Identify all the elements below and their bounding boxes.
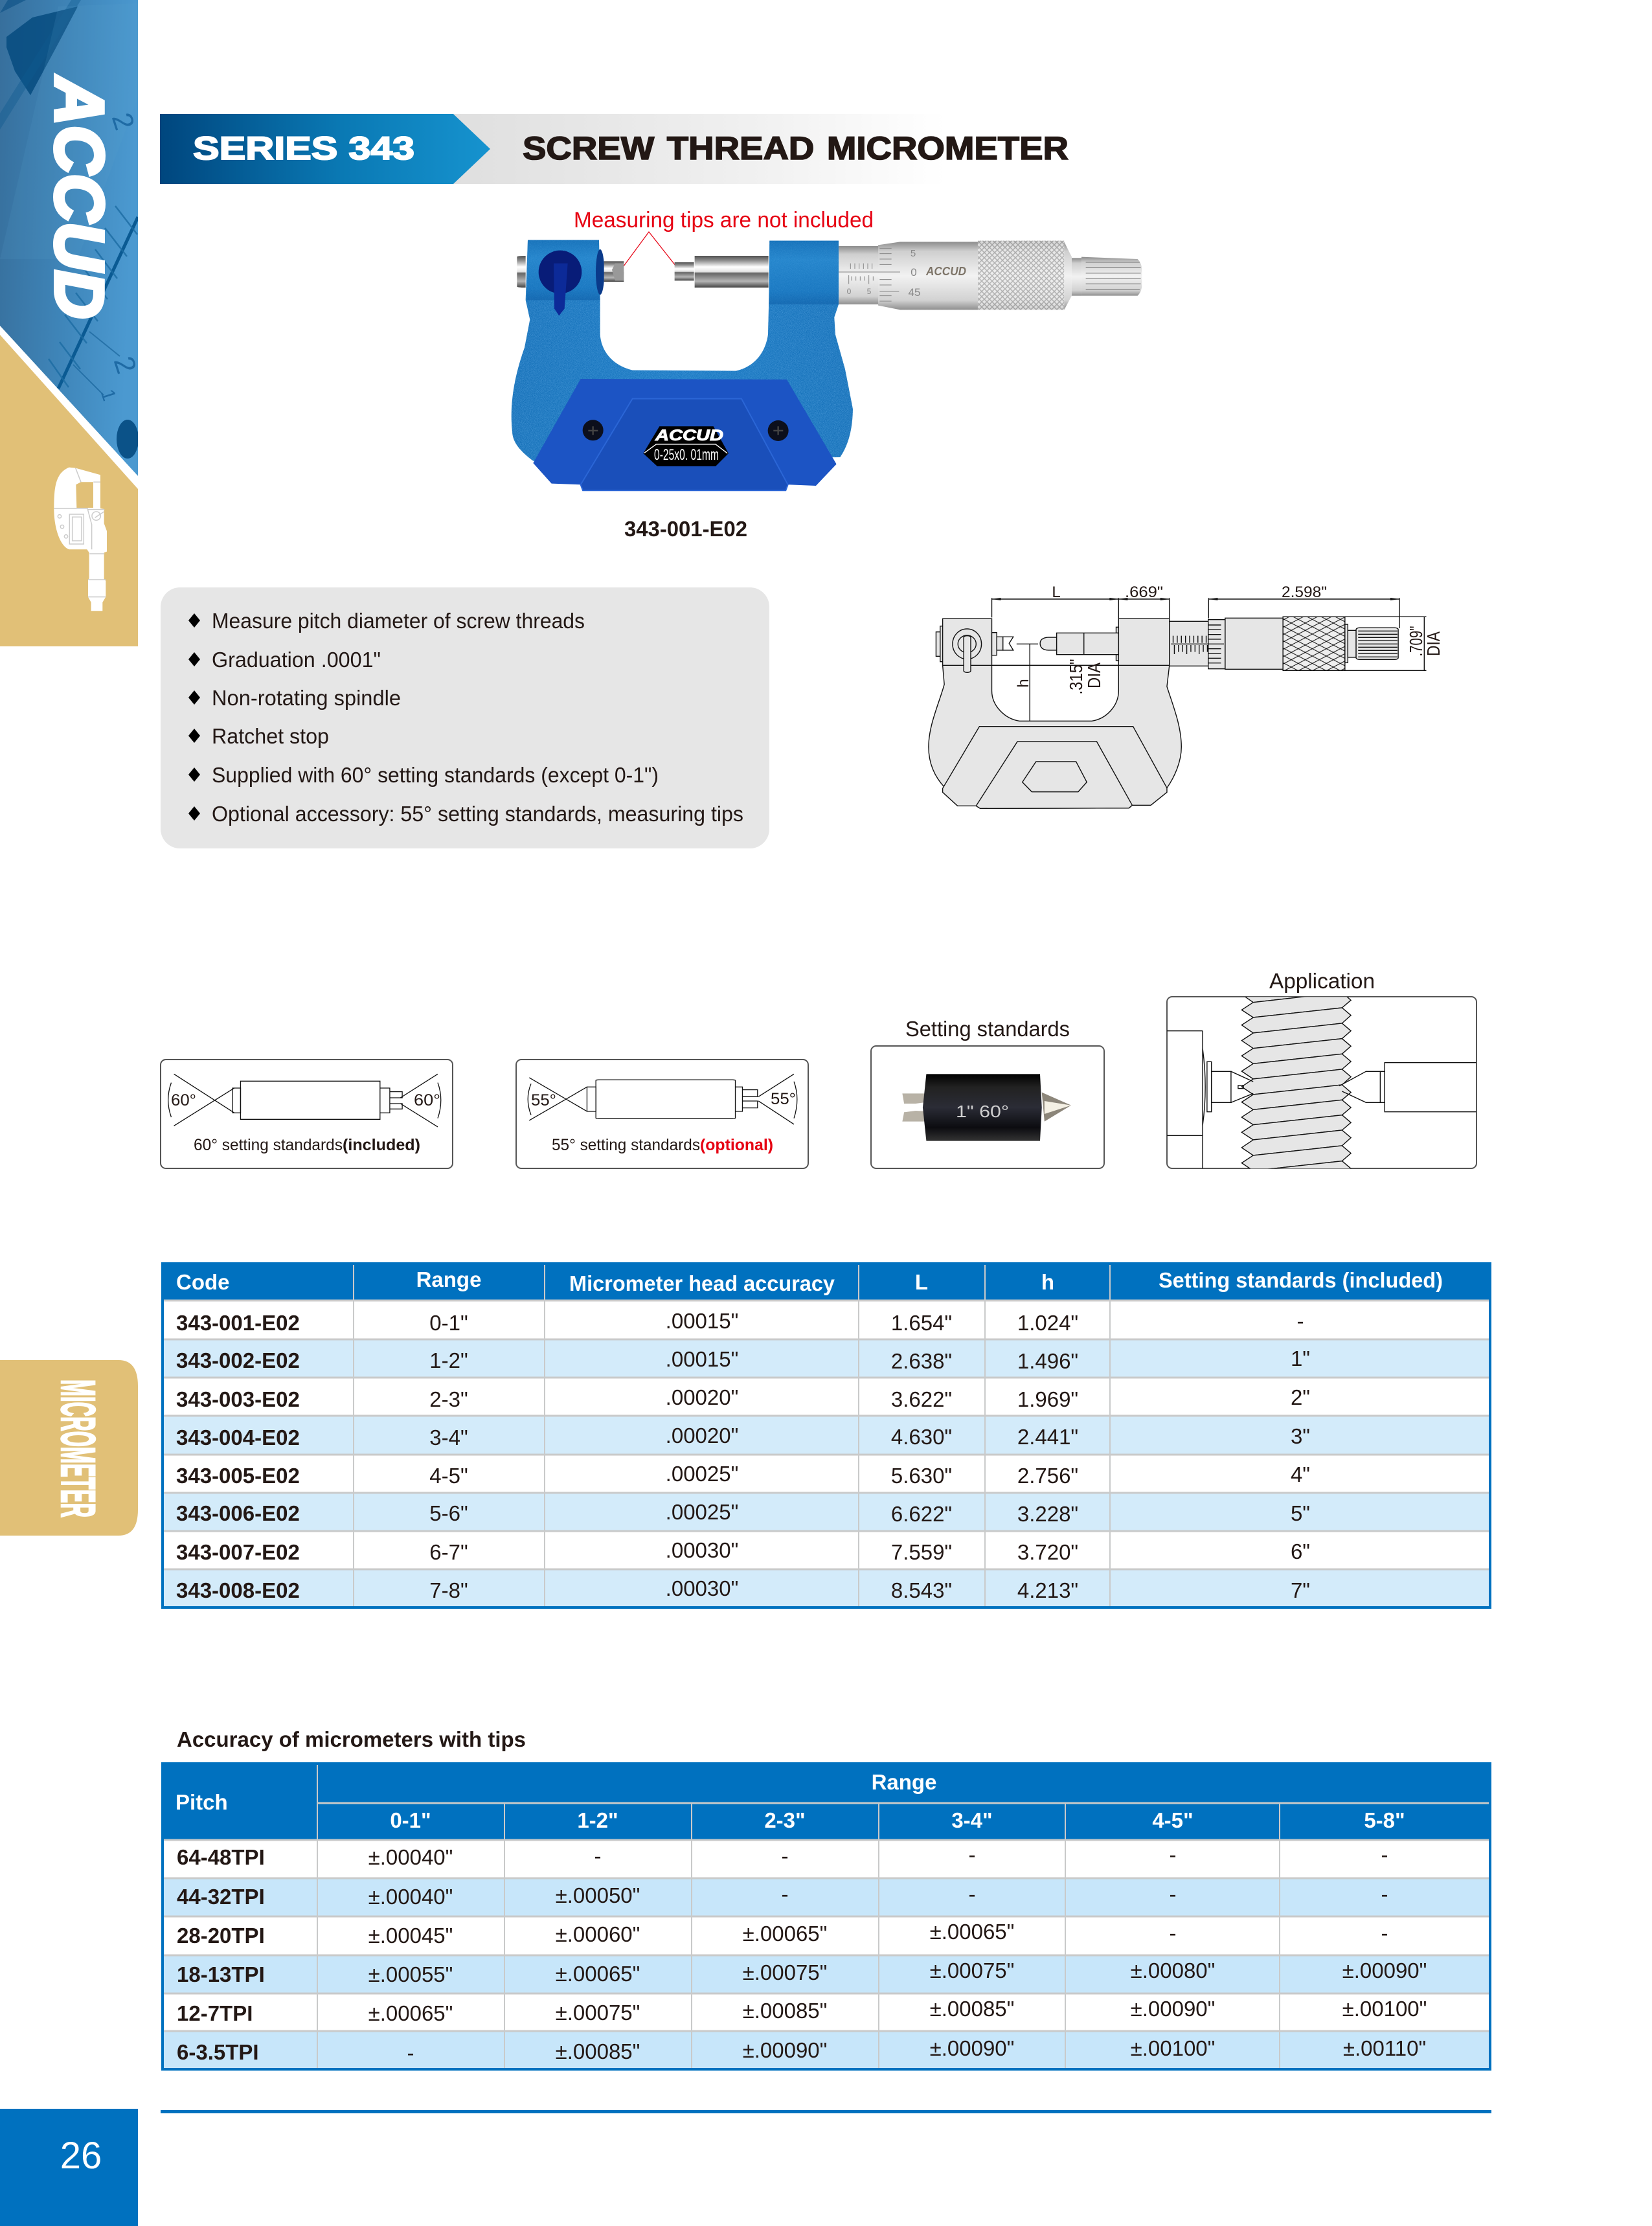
row 3: 2"	[1291, 1385, 1310, 1409]
table header: 2-3"	[764, 1808, 806, 1832]
row 12-7TPI	[177, 1997, 1427, 2025]
row 28-20TPI: ±.00045"	[368, 1924, 453, 1948]
blue cover	[533, 379, 837, 490]
row 18-13TPI: ±.00055"	[368, 1962, 453, 1986]
row 64-48TPI: 64-48TPI	[177, 1845, 265, 1869]
caption: 55° setting standards	[552, 1136, 700, 1154]
icon: digital micrometer	[54, 468, 107, 611]
table header: 0-1"	[390, 1808, 431, 1832]
row 3	[176, 1385, 1310, 1411]
product photo: micrometer: 0-25x0. 01mm	[654, 446, 719, 464]
footer rule	[161, 2110, 1491, 2113]
technical drawing with dimensions: DIA	[1084, 663, 1104, 688]
row 2: 1.496"	[1017, 1349, 1078, 1373]
sidebar: photo banner with logo: 2	[106, 109, 141, 134]
row 64-48TPI: -	[969, 1843, 975, 1867]
row 6: 6.622"	[891, 1502, 952, 1526]
panel: 60 degree setting standards: 60°	[414, 1091, 440, 1109]
row 64-48TPI: -	[781, 1844, 789, 1868]
micrometer head	[839, 241, 1142, 310]
panel: setting standards photo	[871, 1017, 1104, 1168]
row 28-20TPI: ±.00065"	[930, 1920, 1014, 1944]
row 8: 343-008-E02	[176, 1578, 300, 1602]
row 1: 1.654"	[891, 1311, 952, 1335]
table header: L	[915, 1270, 928, 1294]
row 44-32TPI: ±.00050"	[556, 1883, 640, 1907]
table: accuracy with tips	[161, 1762, 1491, 2069]
heading: accuracy table: Accuracy of micrometers with tips	[177, 1727, 526, 1751]
row 8: 4.213"	[1017, 1578, 1078, 1602]
sidebar: gold panel with digital micrometer icon	[0, 335, 138, 646]
technical drawing with dimensions: .709"	[1406, 626, 1426, 657]
frame	[512, 240, 853, 490]
product photo: micrometer: 0	[911, 266, 917, 278]
row 5	[176, 1462, 1310, 1488]
row 1: 343-001-E02	[176, 1311, 300, 1335]
sidebar: photo banner with logo: 2	[107, 352, 142, 378]
row 4: 3"	[1291, 1424, 1310, 1448]
table header: Range	[416, 1267, 481, 1291]
heading: product title: SCREW THREAD MICROMETER	[523, 130, 1069, 166]
row 5: 5.630"	[891, 1464, 952, 1488]
row 6: 5-6"	[429, 1501, 468, 1525]
row 7: 3.720"	[1017, 1540, 1078, 1564]
row 18-13TPI: ±.00065"	[556, 1962, 640, 1986]
panel: features	[161, 587, 769, 848]
row 2	[176, 1346, 1310, 1373]
row 6-3.5TPI: ±.00100"	[1131, 2036, 1215, 2060]
table: specifications	[161, 1262, 1491, 1608]
label: Setting standards	[905, 1017, 1070, 1041]
row 2: 343-002-E02	[176, 1348, 300, 1372]
table header: Micrometer head accuracy	[569, 1271, 835, 1295]
heading: series: SERIES 343	[193, 130, 414, 166]
row 6-3.5TPI: ±.00090"	[930, 2036, 1014, 2060]
feature 4: Ratchet stop	[212, 724, 329, 748]
row 3: .00020"	[666, 1385, 738, 1409]
panel: 55 degree setting standards	[516, 1060, 808, 1168]
table header	[161, 1762, 1491, 1840]
row 44-32TPI	[177, 1882, 1388, 1909]
row 8: 7-8"	[429, 1578, 468, 1602]
product photo: micrometer	[512, 240, 1142, 490]
row 12-7TPI: ±.00075"	[556, 2001, 640, 2025]
feature 5: Supplied with 60° setting standards (except 0-1")	[212, 763, 659, 787]
row 6-3.5TPI: ±.00110"	[1343, 2036, 1426, 2060]
product photo: micrometer: 5	[867, 287, 872, 296]
row 4: 4.630"	[891, 1425, 952, 1449]
row 12-7TPI: ±.00065"	[368, 2001, 453, 2025]
row 6-3.5TPI: ±.00090"	[743, 2038, 827, 2062]
row 28-20TPI: ±.00065"	[743, 1922, 827, 1946]
logo: ACCUD: ACCUD	[41, 75, 117, 319]
feature 3: Non-rotating spindle	[212, 686, 401, 710]
row 2: 1"	[1291, 1346, 1310, 1370]
row 5: 343-005-E02	[176, 1464, 300, 1488]
table header: 5-8"	[1364, 1808, 1405, 1832]
row 2: 2.638"	[891, 1349, 952, 1373]
row 6-3.5TPI: ±.00085"	[556, 2039, 640, 2063]
row 8: 8.543"	[891, 1578, 952, 1602]
row 28-20TPI: -	[1170, 1921, 1176, 1945]
table header: 3-4"	[951, 1808, 993, 1832]
row 28-20TPI: -	[1381, 1921, 1388, 1945]
page number box: 26	[60, 2135, 102, 2177]
label: Application	[1269, 969, 1375, 993]
technical drawing with dimensions: 2.598"	[1282, 584, 1327, 601]
row 4: 343-004-E02	[176, 1425, 300, 1449]
technical drawing with dimensions	[929, 584, 1443, 808]
row 18-13TPI: ±.00080"	[1131, 1959, 1215, 1982]
row 8	[176, 1576, 1310, 1602]
row 12-7TPI: ±.00085"	[930, 1997, 1014, 2021]
row 4: .00020"	[666, 1424, 738, 1448]
row 3: 343-003-E02	[176, 1387, 300, 1411]
row 18-13TPI: ±.00090"	[1342, 1959, 1427, 1982]
row 5: .00025"	[666, 1462, 738, 1486]
row 44-32TPI: -	[969, 1882, 975, 1906]
row 5: 2.756"	[1017, 1464, 1078, 1488]
row 6: 5"	[1291, 1501, 1310, 1525]
table header: h	[1041, 1270, 1054, 1294]
row 18-13TPI: ±.00075"	[743, 1960, 827, 1984]
caption: 60° setting standards	[194, 1136, 343, 1154]
row 3: 1.969"	[1017, 1387, 1078, 1411]
row 18-13TPI: 18-13TPI	[177, 1962, 265, 1986]
row 7: 6"	[1291, 1539, 1310, 1563]
row 44-32TPI: ±.00040"	[368, 1885, 453, 1909]
note: measuring tips	[574, 208, 874, 269]
row 1: 0-1"	[429, 1311, 468, 1335]
row 2: .00015"	[666, 1347, 738, 1371]
badge text: ACCUD	[655, 427, 723, 444]
row 6: 343-006-E02	[176, 1501, 300, 1525]
row 12-7TPI: ±.00085"	[743, 1999, 827, 2023]
row 12-7TPI: ±.00090"	[1131, 1997, 1215, 2021]
table header: 4-5"	[1152, 1808, 1194, 1832]
row 7: 6-7"	[429, 1540, 468, 1564]
dimension labels: L	[1052, 584, 1061, 601]
row 4: 2.441"	[1017, 1425, 1078, 1449]
panel: 55 degree setting standards: (optional)	[700, 1136, 773, 1154]
row 28-20TPI	[177, 1920, 1388, 1948]
technical drawing with dimensions: DIA	[1423, 631, 1443, 656]
feature 2: Graduation .0001"	[212, 648, 381, 672]
panel: 60 degree setting standards: (included)	[343, 1136, 420, 1154]
technical drawing with dimensions: .669"	[1125, 584, 1163, 601]
table header: Range	[872, 1770, 936, 1794]
row 64-48TPI: ±.00040"	[368, 1845, 453, 1869]
row 8: .00030"	[666, 1576, 738, 1600]
row 6: .00025"	[666, 1500, 738, 1524]
table header	[161, 1262, 1491, 1300]
row 3: 3.622"	[891, 1387, 952, 1411]
row 28-20TPI: ±.00060"	[556, 1922, 640, 1946]
product photo: micrometer: 5	[911, 248, 916, 259]
panel: 60 degree setting standards	[161, 1060, 453, 1168]
product code label: 343-001-E02	[624, 517, 747, 541]
row 12-7TPI: ±.00100"	[1342, 1997, 1427, 2021]
row 44-32TPI: 44-32TPI	[177, 1885, 265, 1909]
row 64-48TPI: -	[1170, 1843, 1176, 1867]
row 18-13TPI	[177, 1959, 1427, 1986]
product photo: micrometer: 0	[847, 287, 852, 296]
row 64-48TPI: -	[594, 1844, 601, 1868]
row 6-3.5TPI: -	[407, 2041, 414, 2065]
panel: application diagram	[1167, 969, 1477, 1186]
product photo: micrometer: 45	[909, 286, 920, 299]
row 7	[176, 1538, 1310, 1564]
dimension lines	[992, 598, 1426, 721]
technical drawing with dimensions: .315"	[1066, 659, 1086, 694]
row 5: 4-5"	[429, 1464, 468, 1488]
row 4	[176, 1424, 1310, 1449]
row 12-7TPI: 12-7TPI	[177, 2001, 253, 2025]
panel: 60 degree setting standards: 60°	[171, 1091, 196, 1109]
row 44-32TPI: -	[1381, 1882, 1388, 1906]
row 44-32TPI: -	[1170, 1882, 1176, 1906]
row 7: 7.559"	[891, 1540, 952, 1564]
tab: MICROMETER	[0, 1360, 138, 1536]
table header: 1-2"	[577, 1808, 618, 1832]
table header: Setting standards (included)	[1159, 1268, 1443, 1292]
row 2: 1-2"	[429, 1348, 468, 1372]
text: MICROMETER	[51, 1380, 105, 1517]
product photo: micrometer: ACCUD	[925, 265, 966, 278]
page number box	[0, 2109, 138, 2226]
table header: Pitch	[175, 1790, 228, 1814]
row 44-32TPI: -	[781, 1882, 789, 1906]
table header: Code	[176, 1270, 229, 1294]
feature 6: Optional accessory: 55° setting standards, measuring tips	[212, 802, 743, 826]
row 6: 3.228"	[1017, 1502, 1078, 1526]
sidebar: photo banner with logo: 1	[96, 387, 120, 403]
row 5: 4"	[1291, 1462, 1310, 1486]
technical drawing with dimensions: h	[1015, 679, 1032, 688]
row 8: 7"	[1291, 1578, 1310, 1602]
row 1: -	[1296, 1309, 1304, 1333]
note: measuring tips: Measuring tips are not included	[574, 208, 874, 233]
panel: 55 degree setting standards: 55°	[771, 1090, 796, 1108]
sidebar: photo banner with logo	[0, 0, 142, 492]
row 7: 343-007-E02	[176, 1540, 300, 1564]
row 28-20TPI: 28-20TPI	[177, 1924, 265, 1948]
row 64-48TPI: -	[1381, 1843, 1388, 1867]
header banner: series and title	[160, 114, 1069, 184]
row 6	[176, 1500, 1310, 1526]
panel: setting standards photo: 1" 60°	[956, 1102, 1009, 1121]
row 1: 1.024"	[1017, 1311, 1078, 1335]
row 1	[176, 1309, 1304, 1335]
row 3: 2-3"	[429, 1387, 468, 1411]
row 4: 3-4"	[429, 1425, 468, 1449]
row 6-3.5TPI: 6-3.5TPI	[177, 2040, 259, 2064]
row 6-3.5TPI	[177, 2036, 1426, 2065]
row 1: .00015"	[666, 1309, 738, 1333]
row 7: .00030"	[666, 1538, 738, 1562]
row 18-13TPI: ±.00075"	[930, 1959, 1014, 1982]
row 64-48TPI	[177, 1843, 1388, 1869]
panel: 55 degree setting standards: 55°	[531, 1091, 556, 1109]
feature 1: Measure pitch diameter of screw threads	[212, 609, 585, 633]
